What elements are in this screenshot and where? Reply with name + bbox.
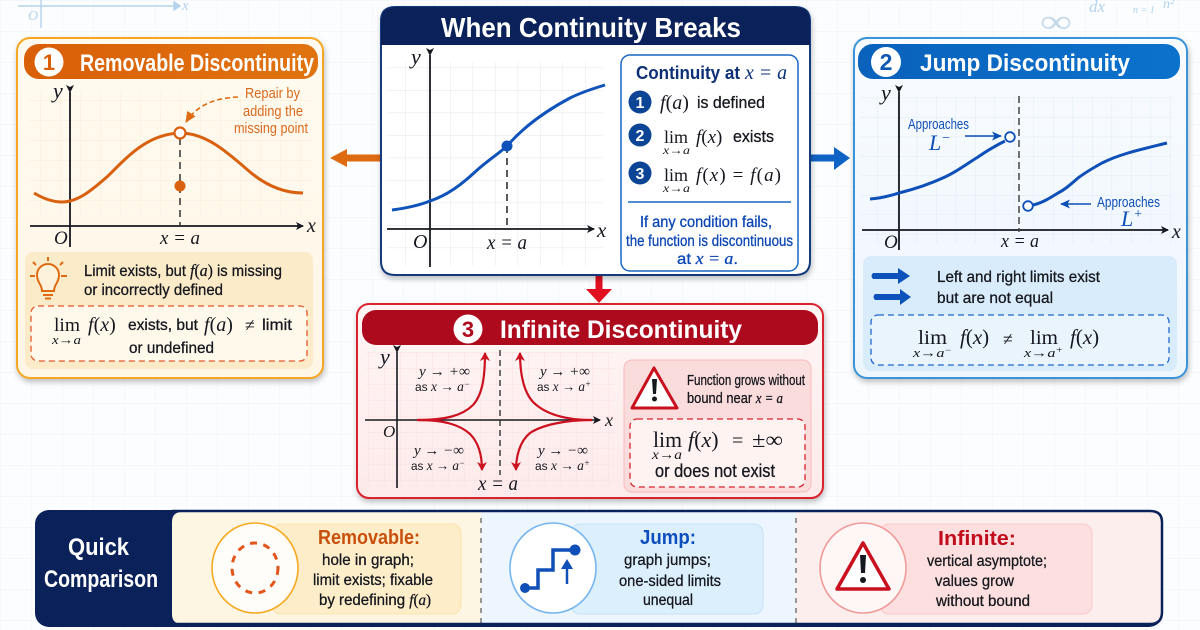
- formula box: infinite: or does not exist: [655, 461, 775, 481]
- formula box: jump: x→a: [1024, 345, 1049, 360]
- label: approaches L plus: +: [1133, 207, 1143, 222]
- formula box: removable: or undefined: [129, 340, 214, 357]
- note box: infinite: [624, 360, 811, 492]
- section: infinite summary: without bound: [935, 593, 1030, 610]
- panel: infinite discontinuity: [357, 304, 823, 498]
- section: removable summary: Removable:: [318, 527, 420, 549]
- condition 3: x→a: [662, 181, 690, 195]
- section: jump summary: unequal: [643, 592, 693, 609]
- header: jump: [858, 44, 1180, 79]
- failure note: the function is discontinuous: [626, 233, 793, 250]
- formula box: jump: [871, 315, 1169, 365]
- failure note: at x = a.: [677, 249, 738, 268]
- icon: warning circle: [820, 523, 906, 613]
- heading: continuity at x=a: x = a: [744, 62, 787, 84]
- graph: removable curve with hole: y: [51, 78, 63, 103]
- header: infinite: 3: [462, 317, 474, 342]
- graph: vertical asymptote: y: [378, 344, 390, 369]
- formula box: jump: ≠: [1003, 329, 1013, 349]
- label: upper right: +: [585, 379, 591, 389]
- panel: jump discontinuity: [854, 38, 1187, 378]
- graph: continuous function: x: [596, 218, 607, 242]
- heading: continuity at x=a: Continuity at: [636, 63, 740, 83]
- graph: continuous function: O: [413, 231, 427, 253]
- formula box: infinite: lim: [653, 427, 682, 452]
- callout: repair: adding the: [243, 103, 303, 120]
- formula box: jump: x→a: [913, 345, 938, 360]
- condition 3: lim: [664, 165, 688, 185]
- condition 1: 1: [636, 95, 645, 112]
- label: lower right: +: [584, 458, 590, 468]
- decorative background math: O: [28, 9, 38, 24]
- label: approaches L minus: Approaches: [908, 117, 969, 133]
- section: jump summary: graph jumps;: [624, 552, 711, 569]
- graph: jump: [860, 80, 1181, 253]
- graph: vertical asymptote: O: [383, 422, 395, 441]
- section: jump summary: Jump:: [640, 527, 696, 549]
- header: infinite: Infinite Discontinuity: [500, 316, 742, 344]
- failure note: If any condition fails,: [640, 214, 772, 231]
- condition 2: [628, 124, 774, 157]
- graph: continuous function: y: [409, 44, 421, 69]
- label: approaches L plus: [1061, 195, 1160, 231]
- formula box: removable: f(a): [204, 314, 233, 336]
- arrow: center to infinite: [586, 275, 612, 303]
- label: approaches L minus: L: [929, 130, 941, 155]
- graph: removable curve with hole: [28, 78, 316, 249]
- label: approaches L plus: L: [1121, 206, 1133, 231]
- failure note: [626, 214, 793, 268]
- arrow: center to removable: [330, 149, 381, 167]
- condition 3: 3: [636, 166, 645, 183]
- section: jump summary: one-sided limits: [619, 573, 721, 590]
- section: infinite summary: Infinite:: [938, 528, 1016, 550]
- header: jump: Jump Discontinuity: [920, 50, 1131, 77]
- condition 1: [628, 90, 765, 114]
- formula box: infinite: ±∞: [752, 427, 783, 452]
- graph: continuous function: [387, 44, 607, 267]
- condition 2: 2: [636, 128, 645, 145]
- formula box: infinite: [630, 419, 805, 487]
- decorative background math: n = 1: [1133, 5, 1155, 16]
- callout: repair: Repair by: [245, 85, 300, 102]
- label: upper right: [537, 364, 591, 394]
- section: removable summary: hole in graph;: [322, 552, 414, 569]
- note box: removable: Limit exists, but f(a) is missing: [84, 261, 282, 280]
- label: quick comparison: [44, 534, 158, 593]
- formula box: infinite: x→a: [651, 448, 682, 463]
- icon: light bulb: [30, 257, 67, 298]
- formula box: jump: f(x): [1070, 325, 1099, 349]
- condition 2: f(x): [696, 127, 722, 148]
- section: infinite summary: values grow: [935, 573, 1014, 590]
- title: [381, 7, 810, 45]
- arrow: center to jump: [809, 147, 850, 170]
- label: quick comparison: Comparison: [44, 566, 158, 593]
- graph: vertical asymptote: x: [604, 410, 613, 430]
- label: upper left: [415, 364, 470, 394]
- decorative background math: ∞: [1040, 3, 1072, 39]
- graph: jump: y: [879, 80, 891, 105]
- section: removable summary: limit exists; fixable: [313, 572, 433, 589]
- graph: vertical asymptote: x = a: [477, 471, 518, 495]
- label: upper left: as x → a: [415, 379, 464, 394]
- note box: removable: or incorrectly defined: [84, 282, 223, 299]
- label: upper right: as x → a: [537, 379, 586, 394]
- formula box: infinite: f(x): [688, 427, 719, 452]
- graph: removable curve with hole: x = a: [159, 228, 200, 249]
- condition 3: [628, 162, 781, 195]
- header: removable: Removable Discontinuity: [80, 50, 315, 77]
- graph: continuous function: x = a: [486, 232, 527, 254]
- conditions box: [621, 55, 798, 271]
- label: upper right: y → +∞: [538, 364, 590, 380]
- label: upper left: −: [464, 379, 470, 389]
- header: infinite: [362, 310, 818, 345]
- header: jump: 2: [880, 49, 892, 75]
- callout: repair: missing point: [234, 120, 309, 137]
- note box: infinite: bound near x = a: [687, 390, 783, 407]
- formula box: removable: f(x): [88, 314, 116, 336]
- label: lower left: y → −∞: [412, 443, 464, 459]
- title: When Continuity Breaks: [441, 12, 741, 43]
- panel: removable discontinuity: [17, 38, 323, 378]
- panel: when continuity breaks (center): [381, 7, 810, 275]
- label: lower left: [411, 443, 465, 473]
- condition 2: x→a: [662, 143, 690, 157]
- label: lower left: as x → a: [411, 458, 460, 473]
- graph: jump: x: [1171, 221, 1181, 243]
- formula box: infinite: =: [732, 430, 743, 452]
- formula box: jump: −: [944, 345, 952, 355]
- graph: removable curve with hole: O: [54, 228, 68, 249]
- decorative background math: [18, 0, 1175, 39]
- icon: warning triangle: [632, 368, 677, 408]
- label: quick comparison: Quick: [68, 534, 130, 561]
- condition 1: is defined: [697, 93, 765, 112]
- note box: jump: Left and right limits exist: [937, 269, 1101, 286]
- label: upper left: y → +∞: [417, 364, 470, 380]
- condition 1: f(a): [660, 92, 689, 114]
- graph: removable curve with hole: x: [306, 215, 316, 237]
- heading: continuity at x=a: [636, 62, 787, 84]
- label: approaches L minus: [908, 117, 1001, 155]
- note box: infinite: Function grows without: [687, 372, 806, 389]
- section: jump summary: [481, 512, 796, 624]
- section: removable summary: by redefining f(a): [319, 592, 431, 609]
- icon: step graph: [510, 523, 596, 613]
- note box: removable: [25, 252, 313, 369]
- note box: jump: [863, 256, 1177, 371]
- section: infinite summary: [796, 512, 1161, 624]
- formula box: removable: lim: [54, 315, 80, 336]
- condition 3: f(x) = f(a): [696, 165, 781, 186]
- label: lower right: y → −∞: [536, 443, 588, 459]
- label: approaches L minus: −: [941, 131, 951, 146]
- formula box: removable: x→a: [51, 332, 82, 347]
- callout: repair: [186, 85, 309, 137]
- note box: jump: but are not equal: [937, 290, 1053, 307]
- panel: quick comparison: [35, 510, 1163, 627]
- formula box: jump: +: [1055, 345, 1063, 355]
- section: infinite summary: vertical asymptote;: [927, 553, 1047, 570]
- condition 2: exists: [733, 127, 774, 146]
- header: removable: [24, 44, 318, 79]
- formula box: removable: limit: [262, 317, 293, 334]
- header: removable: 1: [43, 50, 55, 75]
- icon: two arrows: [872, 268, 911, 305]
- graph: jump: O: [884, 232, 898, 253]
- section: removable summary: [172, 512, 481, 624]
- label: lower left: −: [459, 458, 465, 468]
- formula box: jump: lim: [1030, 327, 1058, 349]
- label: approaches L plus: Approaches: [1097, 195, 1160, 211]
- label: lower right: [535, 443, 590, 473]
- formula box: removable: ≠: [245, 315, 255, 335]
- graph: vertical asymptote: [365, 344, 614, 495]
- graph: jump: x = a: [1000, 231, 1039, 252]
- formula box: jump: f(x): [960, 325, 989, 349]
- label: lower right: as x → a: [535, 458, 584, 473]
- condition 2: lim: [664, 127, 688, 147]
- formula box: removable: [31, 306, 307, 361]
- icon: dashed circle: [212, 523, 298, 613]
- formula box: removable: exists, but: [128, 317, 199, 334]
- formula box: jump: lim: [918, 327, 947, 349]
